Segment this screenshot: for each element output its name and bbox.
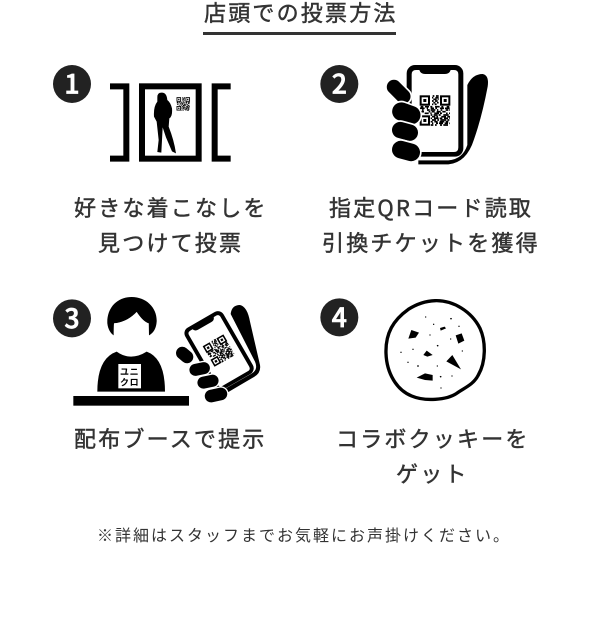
number badge 4: 4	[332, 296, 347, 335]
step 1 caption	[74, 191, 268, 258]
hand and phone	[173, 305, 260, 404]
step 4 caption	[336, 422, 530, 489]
step 4 caption: ゲット	[396, 457, 469, 489]
staff face	[114, 312, 149, 356]
small QR code	[177, 97, 190, 110]
cookie outline	[386, 301, 484, 399]
step 2 illustration	[320, 63, 488, 164]
step 3 illustration	[53, 297, 260, 406]
step 1 caption: 見つけて投票	[98, 226, 243, 258]
back of hand	[418, 74, 488, 164]
step 2 caption: 引換チケットを獲得	[322, 226, 540, 258]
number badge 4	[320, 296, 358, 336]
table	[73, 396, 189, 406]
right bracket	[215, 86, 231, 159]
person silhouette	[154, 93, 176, 153]
mirror frame	[142, 86, 199, 159]
thumb	[383, 76, 415, 108]
step 1 caption: 好きな着こなしを	[74, 191, 268, 223]
number badge 3	[53, 297, 91, 337]
step 2 caption	[322, 191, 540, 258]
logo tag	[118, 364, 141, 388]
tilted phone with QR code	[182, 309, 256, 393]
logo tag: クロ	[120, 375, 139, 388]
staff hair	[107, 297, 157, 335]
back of hand	[223, 305, 260, 394]
title underline	[203, 32, 396, 35]
chocolate chips	[400, 316, 464, 389]
phone with QR code	[407, 65, 463, 157]
step 3 caption: 配布ブースで提示	[74, 422, 267, 454]
number badge 2	[320, 63, 358, 103]
logo tag: ユニ	[120, 365, 139, 378]
step 1 illustration	[53, 63, 231, 159]
number badge 1	[53, 63, 91, 103]
staff body	[97, 352, 165, 392]
number badge 1: 1	[64, 63, 80, 102]
number badge 2: 2	[332, 63, 347, 102]
fingers	[173, 343, 229, 404]
footnote: ※詳細はスタッフまでお気軽にお声掛けください。	[97, 522, 511, 546]
fingers	[389, 99, 424, 164]
step 2 caption: 指定QRコード読取	[329, 191, 533, 223]
left bracket	[110, 86, 126, 159]
number badge 3: 3	[64, 297, 80, 336]
step 4 illustration	[320, 296, 484, 399]
step 4 caption: コラボクッキーを	[336, 422, 530, 454]
